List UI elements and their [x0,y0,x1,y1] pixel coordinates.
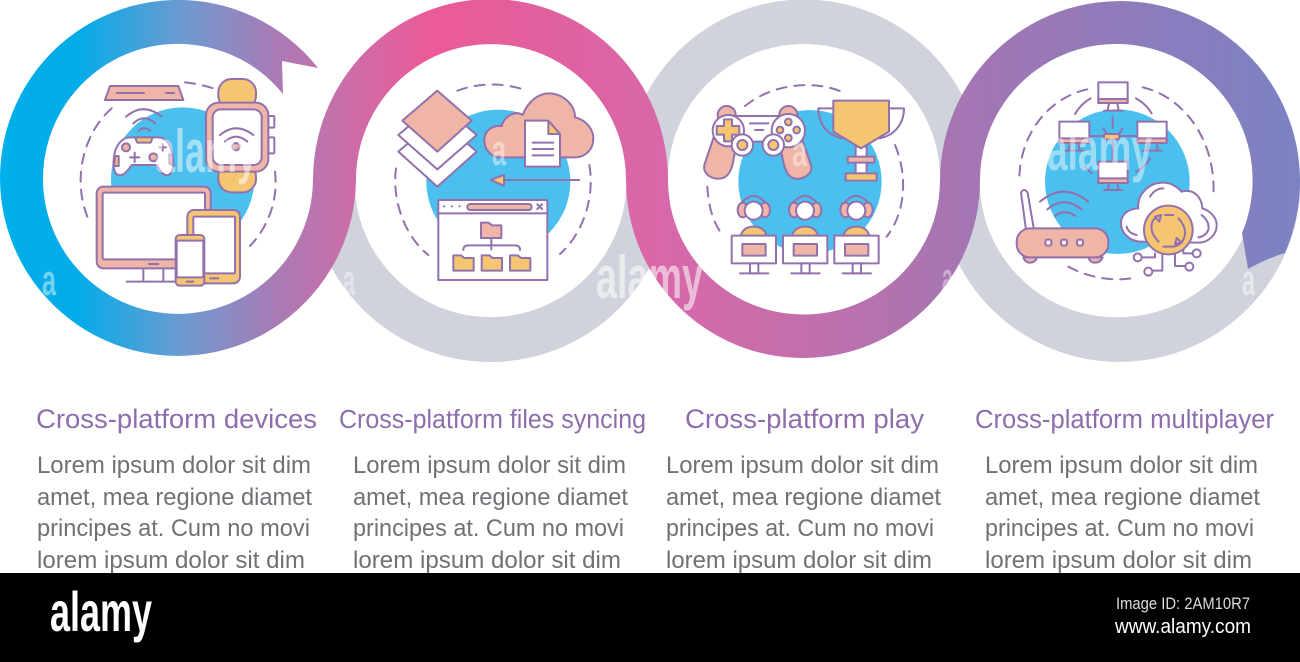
player 2 [783,196,827,273]
column 4 text [975,406,1275,574]
body: files syncing [353,452,628,574]
icon: devices [81,79,276,286]
column 1 text [36,404,317,574]
tablet [187,210,240,283]
dashed orbit [1019,87,1214,279]
body: play [666,452,941,574]
gray background rings [332,22,1278,340]
player 3 [834,196,879,273]
wifi signal [126,109,162,131]
body: devices [37,452,312,574]
phone [176,235,204,286]
body: devices: Lorem ipsum dolor sit dim [37,452,311,479]
watermarks: a [343,256,355,305]
central hub [1104,134,1119,139]
body: play: lorem ipsum dolor sit dim [666,547,932,574]
watermarks: a [492,126,506,175]
footer bar [0,573,1300,662]
player 1 [732,196,776,273]
icon: file sync [395,84,593,280]
body: play: Lorem ipsum dolor sit dim [666,452,939,479]
icon: multiplayer game [704,85,904,273]
router [1017,190,1108,263]
body: files syncing: amet, mea regione diamet [353,484,628,511]
gradient wave ribbon [0,0,1300,358]
body: files syncing: Lorem ipsum dolor sit dim [353,452,626,479]
watermarks [42,116,1255,311]
watermarks: a [1242,256,1255,305]
heading: multiplayer: Cross-platform multiplayer [975,406,1275,434]
body: multiplayer: principes at. Cum no movi [985,515,1254,542]
column 3 text [666,404,941,574]
bottom computer [1098,162,1128,190]
folder window [438,200,547,280]
smartwatch [206,79,274,192]
trophy [818,101,904,181]
body: devices: principes at. Cum no movi [37,515,310,542]
body: files syncing: principes at. Cum no movi [353,515,624,542]
dashed orbit [395,84,591,255]
dashed orbit [81,82,276,246]
heading: play: Cross-platform play [685,404,925,434]
watermarks: a [942,254,953,303]
website: www.alamy.com [1114,616,1251,638]
watermarks: a [42,256,56,305]
gamepad [704,106,811,179]
column 2 text [339,406,646,574]
image id: Image ID: 2AM10R7 [1116,594,1250,613]
stacked sheets [398,91,477,187]
watermarks: alamy [155,118,257,185]
body: multiplayer: lorem ipsum dolor sit dim [985,547,1252,574]
white inner discs [43,43,1252,317]
arrow [491,175,579,186]
top computer [1098,82,1128,111]
icon: network multiplayer [1017,82,1217,279]
footer logo: alamy [50,580,152,643]
cloud with document [484,93,593,167]
right computer [1137,122,1167,151]
watermarks: alamy [1047,116,1152,183]
heading: devices: Cross-platform devices [36,404,317,434]
body: multiplayer: amet, mea regione diamet [985,484,1260,511]
network links [1075,98,1152,173]
body: play: principes at. Cum no movi [666,515,934,542]
body: files syncing: lorem ipsum dolor sit dim [353,547,621,574]
body: multiplayer [985,452,1260,574]
game controller [114,137,173,175]
cloud sync [1121,183,1217,276]
body: multiplayer: Lorem ipsum dolor sit dim [985,452,1258,479]
body: play: amet, mea regione diamet [666,484,941,511]
watermarks: a [792,127,807,176]
monitor [97,187,211,282]
left computer [1059,122,1089,151]
watermarks: alamy [596,244,703,311]
body: devices: amet, mea regione diamet [37,484,312,511]
set-top box [105,86,183,100]
dashed orbit [707,85,903,237]
body: devices: lorem ipsum dolor sit dim [37,547,305,574]
heading: files syncing: Cross-platform files syncing [339,406,646,434]
